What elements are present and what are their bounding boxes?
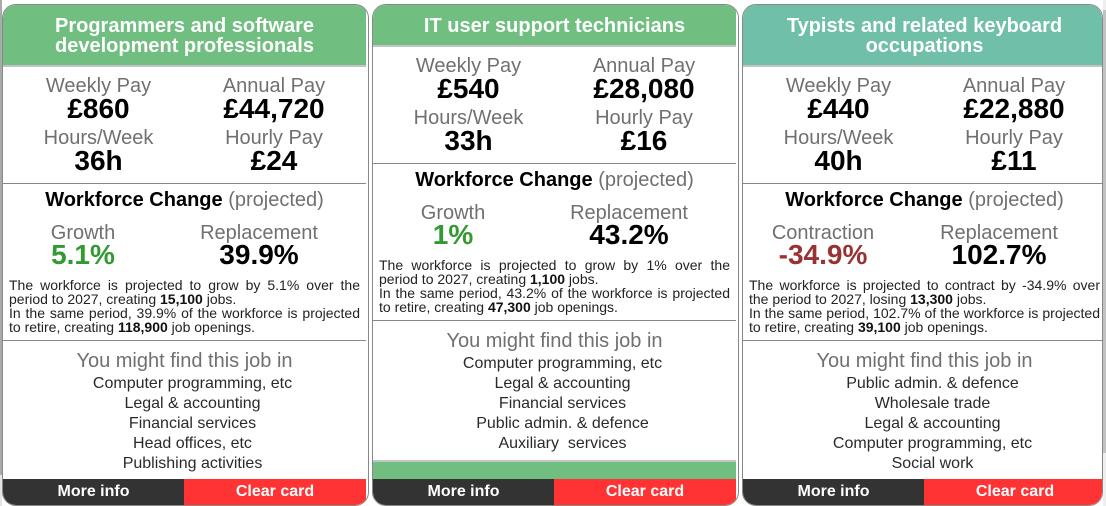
job sectors: Computer programming, etc (93, 375, 292, 392)
workforce change: to retire, creating 39,100 job openings. (749, 319, 988, 335)
green footer band (373, 462, 736, 479)
workforce change: The workforce is projected to grow by 5.1% over the (9, 277, 360, 293)
panel: programmers card (2, 4, 369, 506)
clear card button: Clear card (976, 483, 1054, 500)
job sectors: Publishing activities (123, 455, 262, 472)
workforce change: Contraction (772, 222, 874, 244)
job sectors: Wholesale trade (875, 395, 990, 412)
panel: IT support card (372, 4, 739, 506)
heading: occupations (866, 35, 983, 57)
pay figures: Weekly Pay (46, 75, 151, 97)
pay figures (3, 67, 366, 184)
pay figures: £440 (807, 93, 870, 124)
more info button (743, 479, 924, 505)
more info button: More info (58, 483, 130, 500)
job sectors: Public admin. & defence (846, 375, 1019, 392)
pay figures: Weekly Pay (416, 55, 521, 77)
pay figures: £22,880 (963, 93, 1065, 124)
pay figures: 40h (814, 145, 863, 176)
workforce change: to retire, creating 47,300 job openings. (379, 299, 618, 315)
workforce change: -34.9% (779, 239, 867, 270)
pay figures: 33h (444, 125, 493, 156)
job sectors: Legal & accounting (124, 395, 261, 412)
more info button: More info (428, 483, 500, 500)
workforce change: 1% (433, 219, 473, 250)
job sectors: Computer programming, etc (463, 355, 662, 372)
workforce change: Replacement (570, 202, 688, 224)
workforce change: Workforce Change (projected) (415, 169, 694, 191)
workforce change: Growth (421, 202, 485, 224)
clear card button (924, 479, 1106, 505)
job sectors: Social work (892, 455, 973, 472)
heading: Typists and related keyboard (787, 15, 1062, 37)
workforce change: In the same period, 39.9% of the workforce is projected (9, 305, 360, 321)
pay figures: 36h (74, 145, 123, 176)
job sectors: You might find this job in (816, 350, 1033, 372)
job sectors: Legal & accounting (494, 375, 631, 392)
clear card button: Clear card (236, 483, 314, 500)
job sectors: Head offices, etc (133, 435, 252, 452)
pay figures: Annual Pay (223, 75, 325, 97)
workforce change: In the same period, 43.2% of the workforce is projected (379, 285, 730, 301)
pay figures: Hours/Week (784, 127, 893, 149)
pay figures: £540 (437, 73, 500, 104)
job sectors: Financial services (129, 415, 256, 432)
workforce change: period to 2027, creating 1,100 jobs. (379, 271, 599, 287)
workforce change: Replacement (940, 222, 1058, 244)
workforce change: 102.7% (952, 239, 1046, 270)
workforce change (3, 184, 366, 341)
more info button (373, 479, 554, 505)
pay figures: Hourly Pay (225, 127, 323, 149)
workforce change: Workforce Change (projected) (785, 189, 1064, 211)
clear card button (184, 479, 366, 505)
clear card button (554, 479, 736, 505)
panel: typists card (742, 4, 1103, 506)
workforce change (743, 184, 1106, 341)
job sectors: Financial services (499, 395, 626, 412)
job sectors (816, 350, 1033, 472)
pay figures: £28,080 (593, 73, 695, 104)
workforce change: Replacement (200, 222, 318, 244)
clear card button: Clear card (606, 483, 684, 500)
pay figures: £16 (621, 125, 667, 156)
job sectors: You might find this job in (446, 330, 663, 352)
heading: Programmers and software (55, 15, 314, 37)
workforce change: The workforce is projected to contract by -34.9% over (749, 277, 1100, 293)
heading: IT user support technicians (424, 15, 685, 37)
job sectors (373, 321, 736, 462)
pay figures: Annual Pay (963, 75, 1065, 97)
job sectors: Legal & accounting (864, 415, 1001, 432)
pay figures (373, 47, 736, 164)
job sectors (76, 350, 293, 472)
workforce change: The workforce is projected to grow by 1% over the (379, 257, 730, 273)
workforce change: 5.1% (51, 239, 115, 270)
heading (373, 5, 736, 47)
more info button: More info (798, 483, 870, 500)
pay figures: Annual Pay (593, 55, 695, 77)
pay figures: Weekly Pay (786, 75, 891, 97)
workforce change (373, 164, 736, 321)
pay figures: £24 (251, 145, 297, 176)
workforce change: the period to 2027, losing 13,300 jobs. (749, 291, 986, 307)
workforce change: Workforce Change (projected) (45, 189, 324, 211)
pay figures: £44,720 (223, 93, 325, 124)
workforce change: period to 2027, creating 15,100 jobs. (9, 291, 236, 307)
job sectors: Computer programming, etc (833, 435, 1032, 452)
heading (743, 5, 1106, 67)
job sectors: You might find this job in (76, 350, 293, 372)
pay figures: Hourly Pay (965, 127, 1063, 149)
workforce change: 39.9% (219, 239, 299, 270)
workforce change: 43.2% (589, 219, 669, 250)
pay figures: Hours/Week (414, 107, 523, 129)
more info button (3, 479, 184, 505)
pay figures (743, 67, 1106, 184)
heading: development professionals (55, 35, 314, 57)
job sectors: Public admin. & defence (476, 415, 649, 432)
pay figures: Hours/Week (44, 127, 153, 149)
workforce change: to retire, creating 118,900 job openings. (9, 319, 255, 335)
job sectors: Auxiliary services (498, 435, 627, 452)
workforce change: Growth (51, 222, 115, 244)
pay figures: Hourly Pay (595, 107, 693, 129)
pay figures: £11 (991, 145, 1037, 176)
heading (3, 5, 366, 67)
pay figures: £860 (67, 93, 130, 124)
workforce change: In the same period, 102.7% of the workforce is projected (749, 305, 1100, 321)
